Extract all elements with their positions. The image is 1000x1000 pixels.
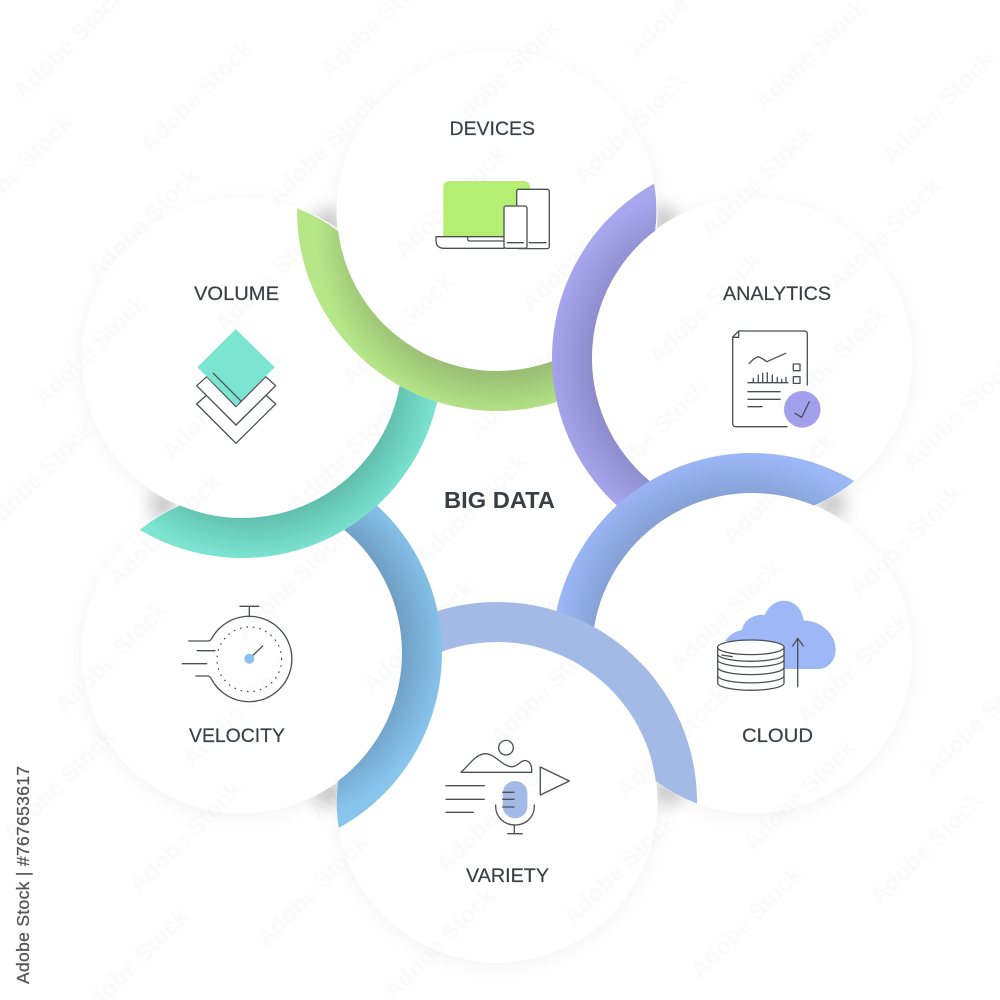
ring: cloud <box>553 453 854 649</box>
label: devices: DEVICES <box>450 119 535 140</box>
ring: devices <box>297 208 576 411</box>
label: analytics: ANALYTICS <box>723 284 831 305</box>
icon: media variety <box>446 740 569 834</box>
icon: cloud database <box>718 601 836 690</box>
stock id text: Adobe Stock | #767653617 <box>13 766 33 984</box>
heading: big data: BIG DATA <box>444 487 555 513</box>
label: velocity: VELOCITY <box>189 726 285 747</box>
disk shadows <box>81 54 913 967</box>
ring: variety <box>419 602 697 804</box>
label: variety: VARIETY <box>466 866 549 887</box>
icon: stopwatch <box>182 606 292 702</box>
icon: stacked layers <box>197 329 276 443</box>
icon: laptop and mobile devices <box>436 181 549 249</box>
label: volume: VOLUME <box>194 284 279 305</box>
ring: velocity <box>326 493 442 828</box>
ring: analytics <box>552 184 668 518</box>
label: cloud: CLOUD <box>742 726 813 747</box>
icon: analytics report <box>733 331 821 428</box>
ring: volume <box>140 386 437 558</box>
white circular panels <box>82 50 912 962</box>
